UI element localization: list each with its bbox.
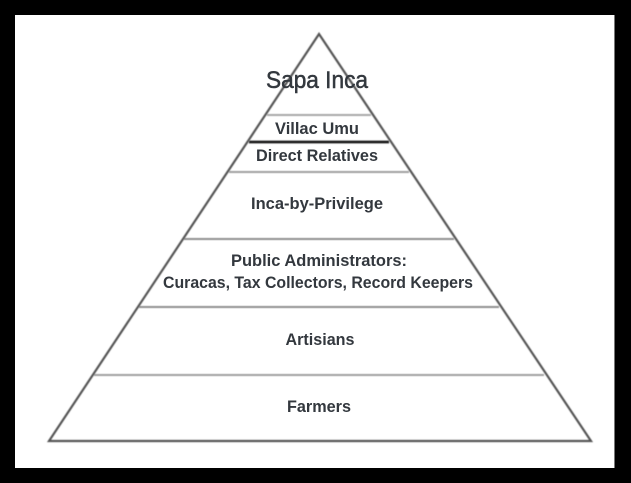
label: Villac Umu: Villac Umu <box>275 120 359 138</box>
pyramid outline <box>49 34 591 441</box>
label: Artisians: Artisians <box>286 330 354 349</box>
label: Direct Relatives: Direct Relatives <box>256 146 378 165</box>
label: Inca-by-Privilege: Inca-by-Privilege <box>251 194 383 213</box>
label: Curacas, Tax Collectors, Record Keepers: Curacas, Tax Collectors, Record Keepers <box>163 273 473 292</box>
tier dividers <box>94 115 544 375</box>
label: Sapa Inca: Sapa Inca <box>266 67 369 94</box>
label: Public Administrators: Public Administrators: <box>231 251 407 270</box>
label: Farmers: Farmers <box>287 397 351 416</box>
